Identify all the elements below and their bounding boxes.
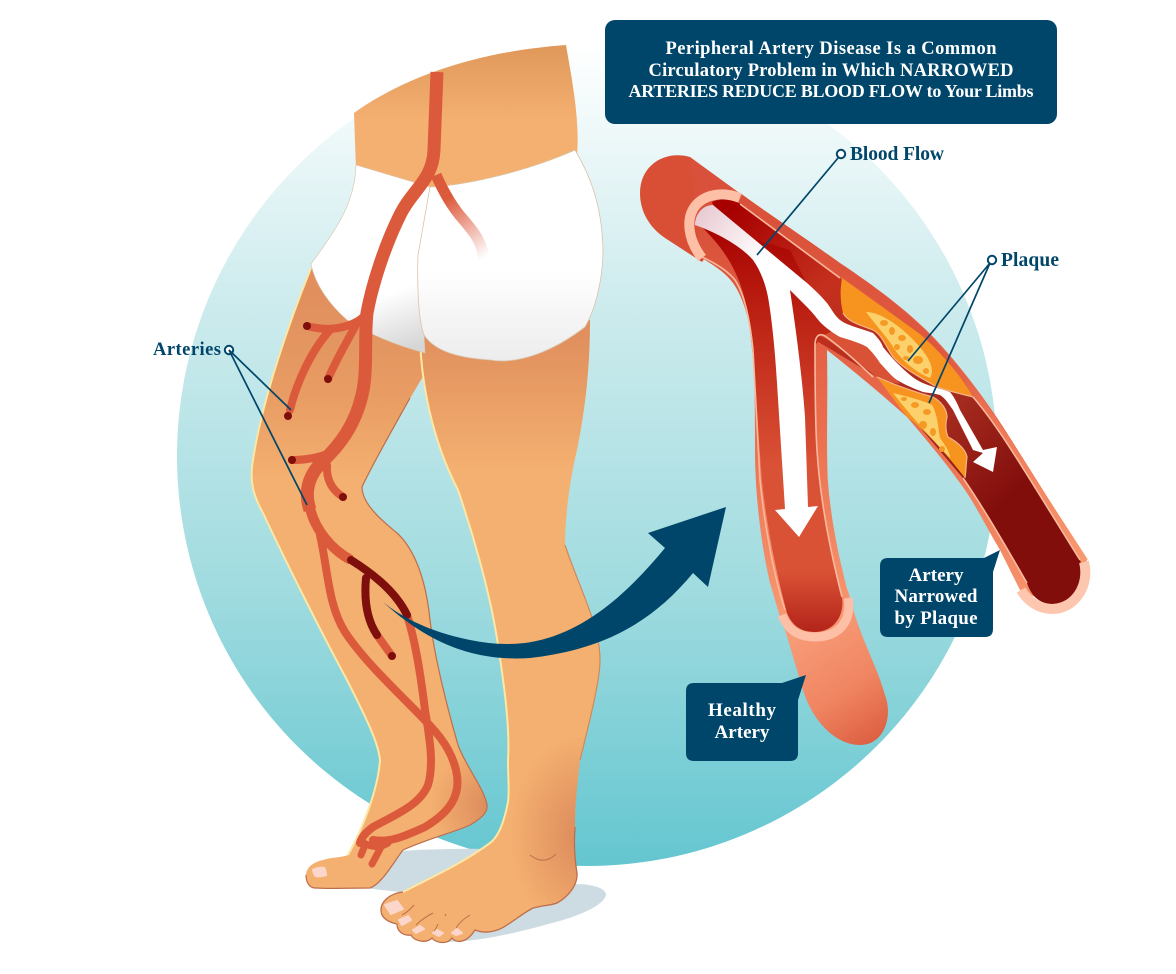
plaque lower mesh [893,393,950,458]
toe creases and ankle bone [402,854,556,931]
callout: narrowed artery: Artery [908,565,964,586]
plaque upper mesh [866,312,932,378]
label: arteries: Arteries [153,340,221,360]
bottom ring of narrowed branch [1021,562,1085,609]
artery back cap [640,155,745,262]
callout: healthy artery [686,675,806,761]
label: plaque [908,250,1059,403]
lumen left [697,222,842,632]
shorts left [311,165,430,353]
white flow arrows [695,205,997,537]
shorts [311,150,603,361]
top ring [689,194,740,258]
artery cross section [640,155,1087,745]
lumen right [712,199,1082,604]
torso [354,45,578,195]
arteries [284,72,484,864]
lower healthy tube end [770,580,888,745]
plaque lower [877,377,967,478]
plaque upper [841,278,973,397]
back leg left highlight [252,268,380,855]
title box: ARTERIES REDUCE BLOOD FLOW to Your Limbs [628,81,1034,101]
main artery [307,72,437,510]
back leg shape [252,268,487,888]
callout: narrowed artery: Narrowed [894,586,978,607]
upper wall [738,197,1084,562]
artery end dots [284,322,396,660]
bottom ring of healthy branch [782,598,849,637]
label: blood flow: Blood Flow [850,144,944,165]
title box: Peripheral Artery Disease Is a Common [666,39,997,59]
callout: healthy artery: Artery [714,722,770,743]
artery outer wall [690,157,1087,645]
back foot toenail [312,867,327,877]
big curved arrow [383,507,726,658]
callout: narrowed artery: by Plaque [894,608,978,629]
heel shading [443,765,486,832]
plaque outlines [843,313,973,478]
back leg right outline [306,398,487,888]
shorts right [418,150,603,361]
callout: narrowed artery [880,550,1000,637]
lumen pale edges [702,204,1080,610]
ankle shading [525,756,580,903]
front leg [381,320,610,943]
front leg foot outline [381,827,577,943]
blocked artery [351,560,407,635]
title box: Circulatory Problem in Which NARROWED [648,61,1014,81]
callout: healthy artery: Healthy [708,700,776,721]
front leg left highlight [403,330,509,892]
background circle [177,46,997,866]
plaque cells [880,320,945,452]
front leg shape [381,320,600,943]
title box [605,20,1057,124]
label: plaque: Plaque [1001,250,1059,271]
foot shadows [365,849,606,942]
crotch wedge [820,335,877,377]
label: arteries [153,340,307,505]
back leg with arteries [252,268,500,888]
label: blood flow [757,144,944,255]
toenails [385,901,462,936]
